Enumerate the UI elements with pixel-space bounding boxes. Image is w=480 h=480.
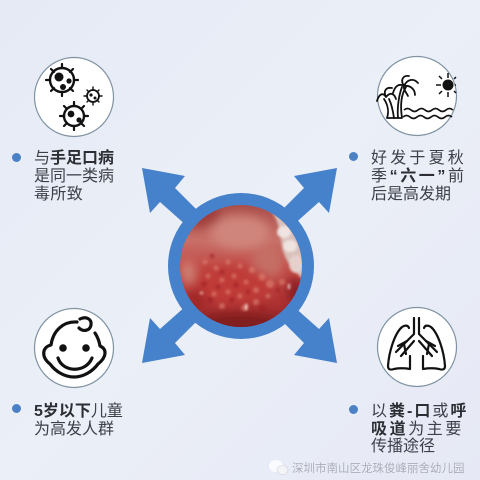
icon: viruses: [34, 56, 114, 138]
panel: season: [349, 56, 467, 203]
text: same virus family: 是同一类病: [34, 168, 114, 185]
text: transmission: 以粪-口或呼: [371, 403, 468, 420]
icon: lungs: [376, 306, 458, 388]
text: season: 季“六一”前: [371, 168, 467, 185]
icon: wechat: [269, 460, 288, 475]
panel: under five: [12, 308, 123, 438]
text: season: [371, 149, 467, 203]
arrows: [142, 168, 337, 363]
text: same virus family: 与手足口病: [34, 150, 114, 167]
watermark: [269, 460, 464, 475]
text: under five: 为高发人群: [34, 421, 114, 438]
text: same virus family: [34, 149, 114, 203]
main diagram: [142, 168, 337, 363]
text: same virus family: 毒所致: [34, 186, 83, 203]
text: season: 后是高发期: [371, 186, 451, 203]
panel: transmission: [349, 306, 468, 455]
bullet: [12, 153, 21, 162]
watermark text: 深圳市南山区龙珠俊峰丽舍幼儿园: [292, 463, 464, 475]
bullet: [349, 152, 358, 161]
central ring: [174, 199, 308, 333]
text: transmission: 吸道为主要: [371, 421, 464, 438]
bullet: [349, 405, 358, 414]
text: under five: 5岁以下儿童: [34, 403, 123, 420]
text: under five: [34, 402, 123, 438]
text: season: 好发于夏秋: [371, 150, 467, 167]
text: transmission: [371, 402, 468, 455]
bullet: [12, 404, 21, 413]
text: transmission: 传播途径: [371, 438, 435, 455]
panel: same virus family: [12, 56, 114, 203]
icon: baby face: [34, 308, 114, 388]
central photo: inflamed mouth: [178, 203, 305, 330]
icon: beach and sun: [376, 56, 458, 136]
